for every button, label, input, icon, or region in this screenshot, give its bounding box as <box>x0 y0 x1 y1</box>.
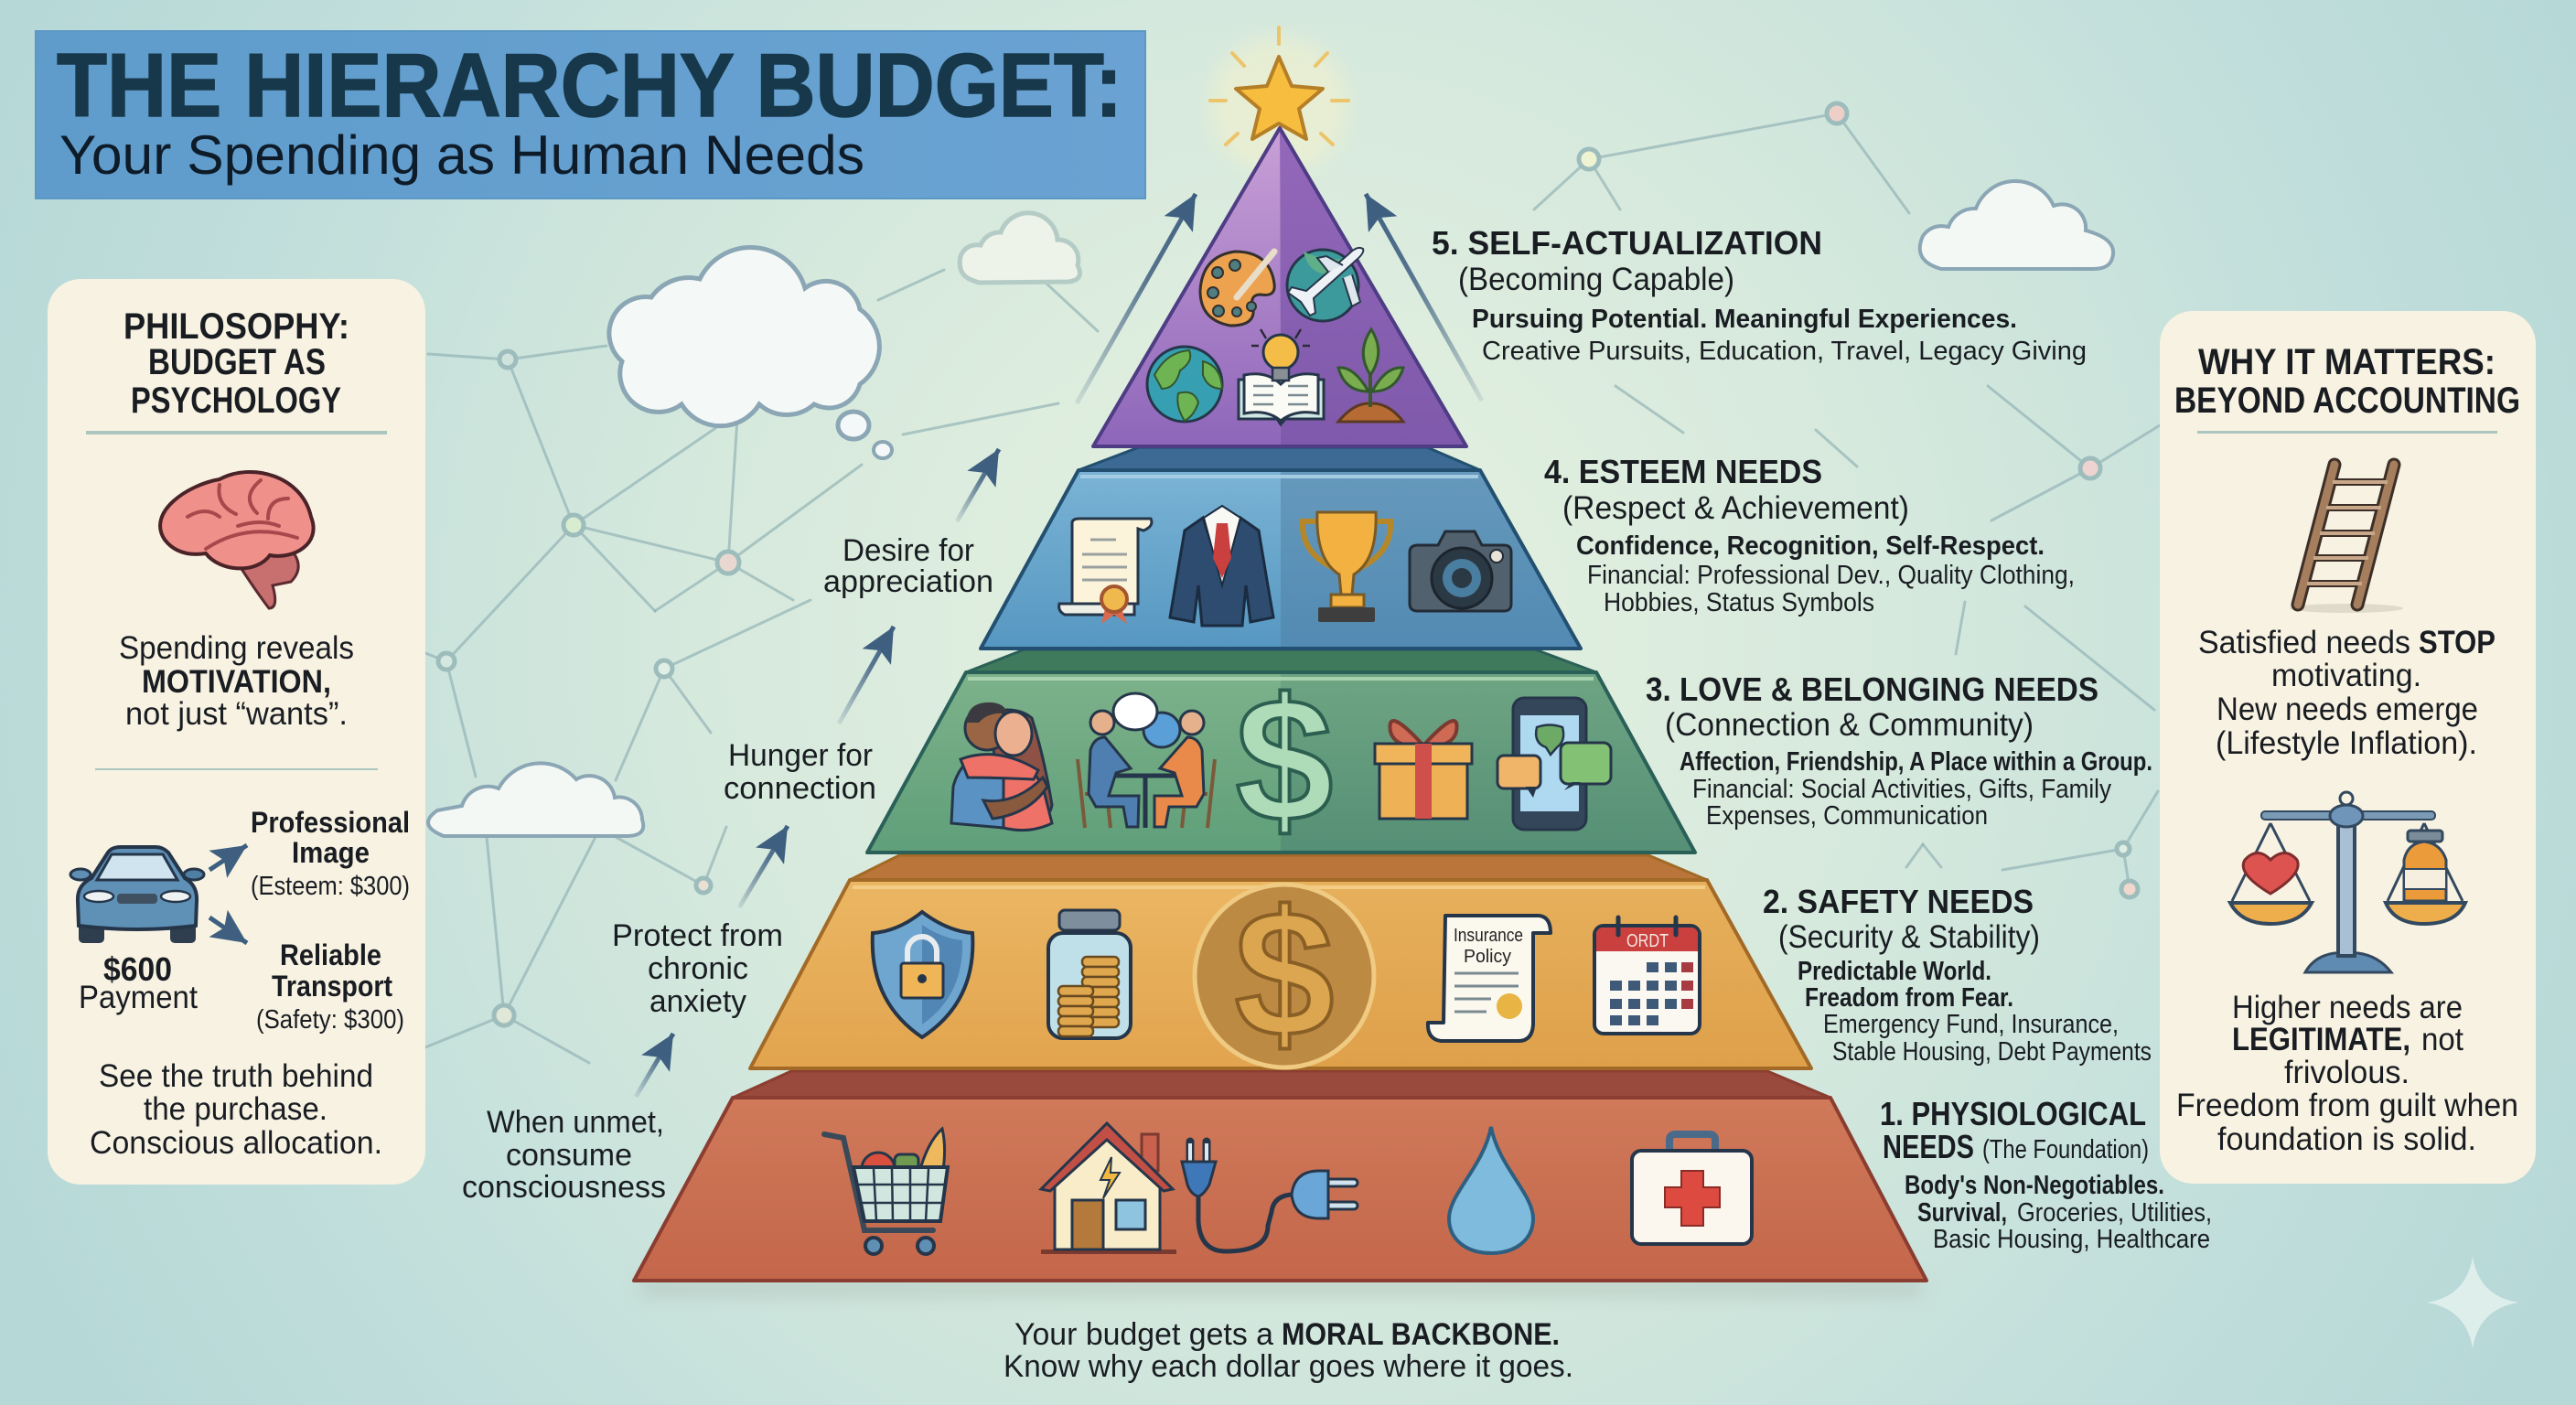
left label: protect from chronic anxiety <box>612 918 783 1019</box>
label: reliable transport: (Safety: $300) <box>256 1005 404 1035</box>
left label: desire for appreciation: appreciation <box>823 564 993 599</box>
tier text 4: esteem <box>1544 453 2075 617</box>
text: spending reveals motivation: MOTIVATION, <box>142 664 331 700</box>
text: satisfied needs: motivating. <box>2271 658 2421 693</box>
tier text 4: esteem: (Respect & Achievement) <box>1562 490 1909 526</box>
tier text 1: physiological: 1. PHYSIOLOGICAL <box>1880 1095 2146 1132</box>
panel heading <box>2174 342 2520 421</box>
icon: trophy <box>1303 512 1390 622</box>
panel heading: WHY IT MATTERS: <box>2198 342 2496 382</box>
tier text 1: physiological: Survival, <box>1917 1198 2007 1228</box>
tier text 4: esteem: Hobbies, Status Symbols <box>1604 588 1874 617</box>
icon: grocery cart <box>824 1129 948 1254</box>
arrow: left up to tip <box>1077 194 1196 403</box>
icon: car <box>70 847 204 943</box>
panel heading: BEYOND ACCOUNTING <box>2174 381 2520 421</box>
pyramid tier 1: physiological <box>634 1071 1927 1281</box>
text: higher needs: foundation is solid. <box>2217 1121 2476 1157</box>
text: satisfied needs: Satisfied needs <box>2198 625 2410 660</box>
left label: protect from chronic anxiety: Protect from <box>612 918 783 953</box>
text: spending reveals motivation: Spending reveals <box>119 630 354 666</box>
panel: why it matters <box>2160 311 2536 1184</box>
network background lines <box>425 103 2160 1063</box>
tier text 5: self-actualization: (Becoming Capable) <box>1458 262 1734 297</box>
icon: hugging couple <box>951 702 1052 831</box>
icon: house with power plug <box>1041 1123 1354 1254</box>
label: professional image: Image <box>292 836 370 869</box>
tier text 4: esteem: Confidence, Recognition, Self-Respect. <box>1576 531 2045 561</box>
arrow: to professional image <box>209 845 247 870</box>
icon: shield with lock <box>873 912 972 1037</box>
tier text 3: love and belonging: Expenses, Communication <box>1706 801 1988 831</box>
text: higher needs: LEGITIMATE, <box>2232 1022 2410 1057</box>
tier text 3: love and belonging <box>1646 670 2152 831</box>
tier text 5: self-actualization: Pursuing Potential. Meaningful Experiences. <box>1472 305 2017 334</box>
text: satisfied needs: New needs emerge <box>2216 692 2478 727</box>
icon: suit <box>1170 506 1273 626</box>
title banner <box>36 31 1145 198</box>
left label: when unmet: consume <box>506 1138 632 1173</box>
label: professional image: Professional <box>251 806 410 839</box>
label: payment <box>79 950 198 1015</box>
icon: diploma <box>1059 519 1152 624</box>
coin with dollar <box>1195 874 1374 1074</box>
icon: water drop <box>1449 1127 1533 1253</box>
tier text 3: love and belonging: (Connection & Community) <box>1665 707 2034 743</box>
tier text 5: self-actualization: 5. SELF-ACTUALIZATION <box>1432 224 1822 262</box>
icon: earth <box>1147 347 1222 422</box>
step arrow: to physiological <box>636 1034 673 1097</box>
left label: hunger for connection: connection <box>724 771 876 806</box>
bottom takeaway: Your budget gets a <box>1014 1317 1273 1352</box>
icon: camera <box>1410 531 1511 611</box>
pyramid tier 4: esteem <box>981 447 1581 649</box>
cloud: small top <box>960 213 1079 283</box>
text: spending reveals motivation: not just “wants”. <box>125 696 348 732</box>
base shadow <box>640 1279 1921 1295</box>
watermark sparkle <box>2427 1257 2518 1348</box>
icon: balance scale <box>2230 792 2465 972</box>
cloud: right <box>1920 181 2113 269</box>
icon: insurance policy scroll <box>1428 916 1551 1041</box>
tier text 1: physiological: Body's Non-Negotiables. <box>1905 1171 2164 1200</box>
tier text 2: safety: Stable Housing, Debt Payments <box>1832 1037 2152 1067</box>
text: conscious allocation: See the truth behind <box>99 1058 373 1094</box>
label: professional image <box>251 806 410 901</box>
tier text 1: physiological: Groceries, Utilities, <box>2017 1198 2212 1228</box>
icon: sprouting plant <box>1338 329 1403 422</box>
panel heading <box>123 306 349 421</box>
text: higher needs: frivolous. <box>2284 1055 2410 1090</box>
left label: hunger for connection <box>724 738 876 806</box>
text: higher needs: not <box>2421 1022 2463 1057</box>
tier text 2: safety: Emergency Fund, Insurance, <box>1823 1010 2119 1039</box>
tier text 4: esteem: Financial: Professional Dev., Quality Clothing, <box>1587 561 2075 590</box>
left label: hunger for connection: Hunger for <box>728 738 873 773</box>
icon: brain <box>160 472 314 608</box>
panel heading: BUDGET AS <box>148 342 326 382</box>
icon: open book with light bulb <box>1239 329 1324 424</box>
icon: star on top <box>1210 27 1348 174</box>
tier text 1: physiological: Basic Housing, Healthcare <box>1933 1225 2210 1254</box>
panel heading: PSYCHOLOGY <box>131 381 341 421</box>
icon: coin jar <box>1048 910 1131 1038</box>
tier text 1: physiological: (The Foundation) <box>1982 1135 2149 1164</box>
left label: desire for appreciation <box>823 533 993 599</box>
icon: people talking at table <box>1078 693 1215 828</box>
icon: first aid kit <box>1632 1134 1752 1244</box>
text: higher needs <box>2176 990 2518 1157</box>
tier text 2: safety: (Security & Stability) <box>1778 919 2040 955</box>
left label: when unmet <box>462 1105 666 1205</box>
icon: calendar: ORDT <box>1626 931 1669 951</box>
tier text 1: physiological: NEEDS <box>1883 1128 1974 1165</box>
tier text 2: safety: Predictable World. <box>1798 957 1991 986</box>
icon: insurance policy scroll: Policy <box>1464 947 1511 967</box>
icon: globe with plane <box>1287 248 1363 321</box>
coin with dollar: $ <box>1234 874 1335 1074</box>
label: professional image: (Esteem: $300) <box>251 872 410 901</box>
step arrow: to love <box>839 627 894 724</box>
text: conscious allocation <box>90 1058 382 1161</box>
left label: when unmet: When unmet, <box>487 1105 664 1140</box>
bottom takeaway: Know why each dollar goes where it goes. <box>1004 1349 1573 1384</box>
tier text 5: self-actualization: Creative Pursuits, Education, Travel, Legacy Giving <box>1482 337 2087 366</box>
cloud: large thought cloud <box>609 248 892 458</box>
tier text 1: physiological <box>1880 1095 2212 1254</box>
tier text 4: esteem: 4. ESTEEM NEEDS <box>1544 453 1822 490</box>
icon: calendar <box>1594 917 1700 1034</box>
icon: paint palette <box>1200 252 1274 326</box>
text: satisfied needs <box>2198 625 2496 761</box>
text: higher needs: Freedom from guilt when <box>2176 1088 2518 1123</box>
tier text 3: love and belonging: 3. LOVE & BELONGING NEEDS <box>1646 670 2098 708</box>
tier text 5: self-actualization <box>1432 224 2087 366</box>
subtitle: Your Spending as Human Needs <box>59 124 864 186</box>
cloud: lower left <box>428 763 643 836</box>
pyramid tier 5: self-actualization <box>1093 128 1466 446</box>
panel: philosophy <box>48 279 425 1185</box>
left label: protect from chronic anxiety: anxiety <box>649 984 746 1019</box>
text: higher needs: Higher needs are <box>2232 990 2463 1025</box>
step arrow: to safety <box>739 826 788 907</box>
tier text 3: love and belonging: Affection, Friendship, A Place within a Group. <box>1680 747 2152 777</box>
label: reliable transport <box>256 938 404 1035</box>
text: spending reveals motivation <box>119 630 354 732</box>
title heading: THE HIERARCHY BUDGET: <box>57 35 1122 135</box>
bottom takeaway <box>1004 1317 1573 1384</box>
large dollar sign: $ <box>1236 661 1333 858</box>
tier text 2: safety <box>1763 883 2152 1067</box>
icon: phone with chat bubbles <box>1497 698 1611 830</box>
panel heading: PHILOSOPHY: <box>123 306 349 347</box>
icon: insurance policy scroll: Insurance <box>1454 926 1523 946</box>
left label: when unmet: consciousness <box>462 1170 666 1205</box>
arrow: to reliable transport <box>209 917 247 943</box>
icon: gift <box>1375 721 1472 819</box>
label: reliable transport: Reliable <box>280 938 381 971</box>
text: conscious allocation: Conscious allocation. <box>90 1125 382 1161</box>
tier text 2: safety: 2. SAFETY NEEDS <box>1763 883 2034 920</box>
text: conscious allocation: the purchase. <box>144 1091 327 1127</box>
step arrow: to esteem <box>957 449 999 521</box>
text: satisfied needs: STOP <box>2419 625 2496 660</box>
tier text 3: love and belonging: Financial: Social Activities, Gifts, Family <box>1692 775 2111 804</box>
tier text 2: safety: Freadom from Fear. <box>1805 983 2013 1013</box>
label: payment: Payment <box>79 980 198 1015</box>
pyramid tier 2: safety <box>750 855 1811 1074</box>
label: payment: $600 <box>103 950 172 988</box>
label: reliable transport: Transport <box>272 970 392 1003</box>
text: satisfied needs: (Lifestyle Inflation). <box>2216 725 2477 761</box>
arrow: right up to tip <box>1366 194 1482 401</box>
icon: ladder <box>2290 465 2403 613</box>
bottom takeaway: MORAL BACKBONE. <box>1282 1317 1560 1352</box>
pyramid tier 3: love and belonging <box>867 649 1695 858</box>
left label: protect from chronic anxiety: chronic <box>648 951 748 986</box>
left label: desire for appreciation: Desire for <box>843 533 974 568</box>
